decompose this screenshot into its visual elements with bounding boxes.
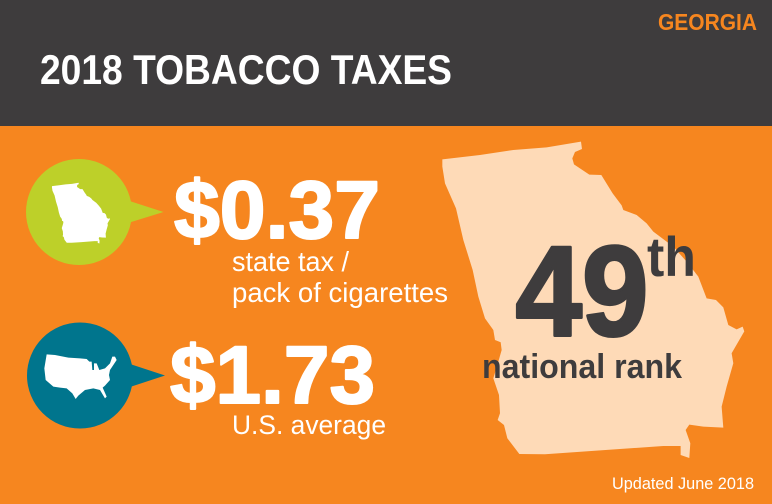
- state tax amount: $0.37: [174, 165, 380, 256]
- icon: Georgia outline: [52, 183, 110, 243]
- US average bubble: [27, 322, 165, 428]
- header band: [0, 0, 772, 126]
- state tax bubble: [26, 159, 164, 265]
- rank caption: national rank: [482, 348, 682, 386]
- US average amount: $1.73: [170, 330, 375, 421]
- update note: Updated June 2018: [612, 474, 754, 493]
- Georgia map backdrop: [442, 142, 744, 458]
- rank number: 49: [516, 220, 648, 364]
- state tax caption: state tax /: [232, 246, 349, 277]
- icon: United States outline: [44, 354, 117, 399]
- state tax caption: pack of cigarettes: [232, 277, 448, 308]
- US average caption: U.S. average: [232, 410, 386, 440]
- rank suffix: th: [647, 225, 696, 288]
- state label: GEORGIA: [658, 9, 757, 35]
- title: 2018 TOBACCO TAXES: [40, 46, 452, 93]
- state tax caption: [232, 246, 448, 308]
